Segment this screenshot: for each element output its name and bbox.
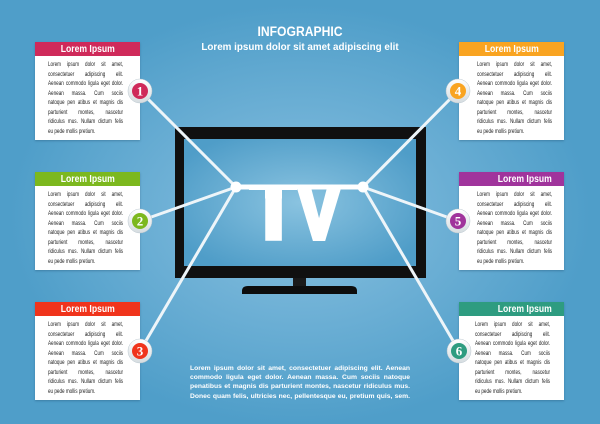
footer text block: penatibus et magnis dis parturient montes, nascetur ridiculus mus. — [190, 383, 410, 390]
card 6 text: Aenean massa. Cum sociis — [475, 350, 550, 357]
card 6 text: Aenean commodo ligula eget dolor. — [475, 340, 550, 347]
badge 2: 2 — [137, 214, 143, 228]
card 4 heading — [459, 42, 564, 56]
card 6 text: consectetuer adipiscing elit. — [475, 331, 550, 338]
card 4 text: Aenean commodo ligula eget dolor. — [477, 80, 552, 87]
card 3 text — [48, 321, 123, 395]
card 4 text: eu pede mollis pretium. — [477, 128, 524, 135]
badge 2 — [128, 209, 152, 233]
television with connector lines — [144, 98, 454, 342]
badge 3 — [128, 339, 152, 363]
card 3 text: parturient montes, nascetur — [48, 369, 123, 376]
card 5 heading: Lorem Ipsum — [497, 174, 552, 185]
card 1 text: ridiculus mus. Nullam dictum felis — [48, 118, 123, 125]
tv frame — [175, 127, 426, 278]
footer text block: Donec quam felis, ultricies nec, pellentesque eu, pretium quis, sem. — [190, 393, 410, 400]
panel: card 5 — [459, 172, 564, 270]
card 6 heading — [459, 302, 564, 316]
card 6 text: Lorem ipsum dolor sit amet, — [475, 321, 550, 328]
card 3 text: natoque pen atibus et magnis dis — [48, 359, 123, 366]
card 5 text — [477, 191, 552, 265]
card 1 text: Aenean massa. Cum sociis — [48, 90, 123, 97]
card 4 heading: Lorem Ipsum — [484, 44, 539, 55]
card 1 text: Aenean commodo ligula eget dolor. — [48, 80, 123, 87]
badge 4: 4 — [455, 84, 462, 98]
card 2 text: Lorem ipsum dolor sit amet, — [48, 191, 123, 198]
tv stand — [242, 277, 357, 294]
card 5 text: consectetuer adipiscing elit. — [477, 201, 552, 208]
badge 6: 6 — [456, 344, 463, 358]
connector nodes — [230, 182, 368, 192]
tv label: T — [251, 173, 296, 254]
card 3 heading — [35, 302, 140, 316]
card 3 text: Lorem ipsum dolor sit amet, — [48, 321, 123, 328]
card 2 heading: Lorem Ipsum — [60, 174, 115, 185]
card 4 text: ridiculus mus. Nullam dictum felis — [477, 118, 552, 125]
card 4 text: parturient montes, nascetur — [477, 109, 552, 116]
card 4 text — [477, 61, 552, 135]
card 6 text: ridiculus mus. Nullam dictum felis — [475, 378, 550, 385]
tv label: V — [299, 173, 339, 254]
badge 5: 5 — [455, 214, 462, 228]
card 1 text: parturient montes, nascetur — [48, 109, 123, 116]
panel: card 4 — [459, 42, 564, 140]
card 4 text: Lorem ipsum dolor sit amet, — [477, 61, 552, 68]
card 1 heading: Lorem Ipsum — [60, 44, 115, 55]
card 3 text: Aenean commodo ligula eget dolor. — [48, 340, 123, 347]
card 5 text: parturient montes, nascetur — [477, 239, 552, 246]
card 6 text: parturient montes, nascetur — [475, 369, 550, 376]
card 6 heading: Lorem Ipsum — [497, 304, 552, 315]
card 2 text: ridiculus mus. Nullam dictum felis — [48, 248, 123, 255]
card 6 text: natoque pen atibus et magnis dis — [475, 359, 550, 366]
title: INFOGRAPHIC — [257, 24, 343, 39]
card 5 text: natoque pen atibus et magnis dis — [477, 229, 552, 236]
subtitle: Lorem ipsum dolor sit amet adipiscing elit — [201, 42, 399, 53]
card 4 text: consectetuer adipiscing elit. — [477, 71, 552, 78]
badge 1 — [128, 79, 152, 103]
card 2 text: Aenean massa. Cum sociis — [48, 220, 123, 227]
panel: card 2 — [35, 172, 140, 270]
card 2 text — [48, 191, 123, 265]
card 6 text: eu pede mollis pretium. — [475, 388, 522, 395]
card 1 heading — [35, 42, 140, 56]
badge 5 — [446, 209, 470, 233]
card 3 heading: Lorem Ipsum — [60, 304, 115, 315]
connector lines — [140, 91, 459, 351]
card 4 text: Aenean massa. Cum sociis — [477, 90, 552, 97]
card 2 text: parturient montes, nascetur — [48, 239, 123, 246]
tv label — [249, 190, 341, 241]
card 3 text: eu pede mollis pretium. — [48, 388, 95, 395]
card 1 text: natoque pen atibus et magnis dis — [48, 99, 123, 106]
card 1 text: consectetuer adipiscing elit. — [48, 71, 123, 78]
panel: card 1 — [35, 42, 140, 140]
card 5 text: Aenean commodo ligula eget dolor. — [477, 210, 552, 217]
card 5 text: ridiculus mus. Nullam dictum felis — [477, 248, 552, 255]
card 4 text: natoque pen atibus et magnis dis — [477, 99, 552, 106]
card 2 text: natoque pen atibus et magnis dis — [48, 229, 123, 236]
card 5 text: Aenean massa. Cum sociis — [477, 220, 552, 227]
card 6 text — [475, 321, 550, 395]
badge 3: 3 — [137, 344, 144, 358]
card 3 text: Aenean massa. Cum sociis — [48, 350, 123, 357]
footer text block: commodo ligula eget dolor. Aenean massa. Cum sociis natoque — [190, 374, 410, 381]
card 1 text: Lorem ipsum dolor sit amet, — [48, 61, 123, 68]
card 1 text — [48, 61, 123, 135]
card 2 heading — [35, 172, 140, 186]
card 5 text: Lorem ipsum dolor sit amet, — [477, 191, 552, 198]
card 5 text: eu pede mollis pretium. — [477, 258, 524, 265]
card 2 text: eu pede mollis pretium. — [48, 258, 95, 265]
card 1 text: eu pede mollis pretium. — [48, 128, 95, 135]
card 5 heading — [459, 172, 564, 186]
footer text block — [190, 364, 410, 400]
panel: card 3 — [35, 302, 140, 400]
card 3 text: consectetuer adipiscing elit. — [48, 331, 123, 338]
card 2 text: Aenean commodo ligula eget dolor. — [48, 210, 123, 217]
card 2 text: consectetuer adipiscing elit. — [48, 201, 123, 208]
badge 4 — [446, 79, 470, 103]
card 3 text: ridiculus mus. Nullam dictum felis — [48, 378, 123, 385]
badge 1: 1 — [137, 84, 143, 98]
badge 6 — [447, 339, 471, 363]
footer text block: Lorem ipsum dolor sit amet, consectetuer adipiscing elit. Aenean — [190, 364, 410, 372]
panel: card 6 — [459, 302, 564, 400]
